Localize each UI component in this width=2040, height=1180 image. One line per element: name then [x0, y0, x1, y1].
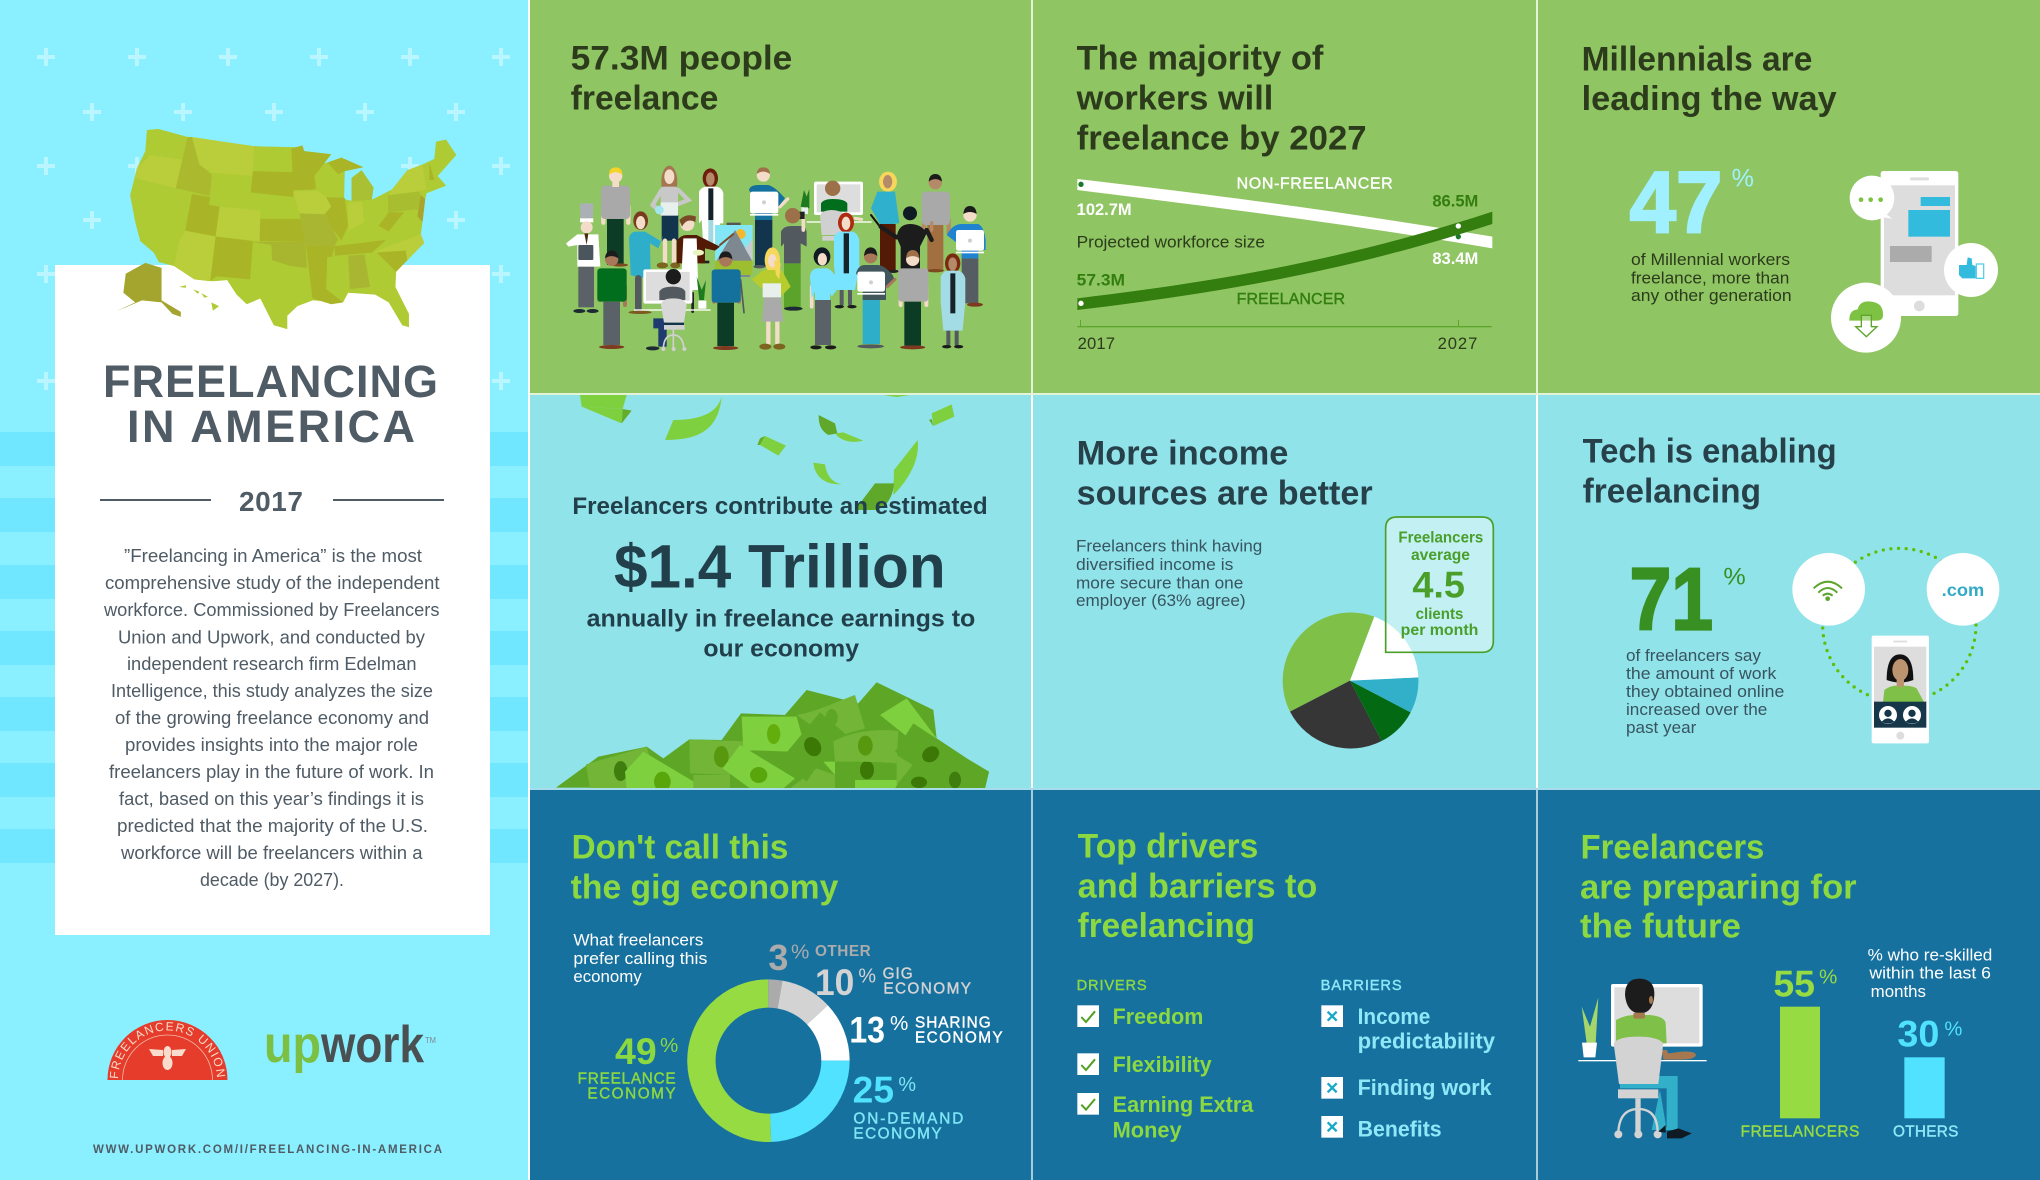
heading: freelance by 2027 — [1077, 119, 1367, 157]
panel: millennials are leading the way — [1538, 0, 2040, 393]
intro paragraph: of the growing freelance economy and — [115, 707, 429, 728]
woman in teal dress — [628, 211, 663, 314]
man in green shirt — [597, 251, 627, 349]
intro paragraph: Intelligence, this study analyzes the size — [111, 680, 433, 701]
logo: Upwork — [264, 1016, 436, 1074]
label: 49% freelance economy: FREELANCE — [578, 1070, 676, 1087]
description: Freelancers think having — [1076, 537, 1262, 556]
woman in pale teal coat — [941, 253, 965, 348]
stat description: of Millennial workers — [1631, 250, 1790, 269]
heading — [571, 828, 838, 906]
stat description: they obtained online — [1626, 682, 1784, 701]
title: FREELANCING — [103, 356, 438, 407]
label: 25% on-demand economy — [853, 1069, 963, 1142]
drivers list: Flexibility — [1113, 1052, 1212, 1077]
heading: The majority of — [1077, 39, 1324, 77]
label: 10% gig economy: ECONOMY — [883, 980, 971, 997]
man with phone seen from behind — [781, 208, 807, 311]
pie chart: income sources — [1283, 613, 1418, 748]
logo: Upwork: up — [264, 1016, 321, 1074]
chart caption: prefer calling this — [573, 949, 707, 968]
heading: sources are better — [1077, 474, 1373, 512]
label: 13% sharing economy: SHARING — [915, 1014, 991, 1031]
illustration: freelancer at desk — [1578, 979, 1707, 1138]
stat description: of freelancers say — [1626, 646, 1762, 665]
label: 49% freelance economy: % — [660, 1034, 678, 1057]
description: employer (63% agree) — [1076, 591, 1246, 610]
drivers list: DRIVERS — [1077, 978, 1147, 994]
callout: 4.5 clients per month: average — [1411, 547, 1470, 564]
bar: freelancers 55%: FREELANCERS — [1741, 1124, 1859, 1141]
line chart: projected workforce: Projected workforce size — [1077, 233, 1265, 252]
big stat 71%: % — [1723, 563, 1746, 590]
man in black seen from behind — [881, 206, 932, 270]
blonde woman in teal — [871, 172, 899, 273]
bar: others 30% — [1893, 1014, 1962, 1141]
economic contribution statement: annually in freelance earnings to — [587, 606, 975, 633]
label: 10% gig economy: GIG — [883, 965, 913, 982]
icon: .com: .com — [1942, 580, 1984, 600]
label: 49% freelance economy: 49 — [615, 1031, 657, 1072]
label: 10% gig economy — [815, 962, 971, 1003]
callout: 4.5 clients per month: 4.5 — [1412, 563, 1465, 605]
woman in light-blue shirt — [810, 247, 841, 349]
barriers list: BARRIERS — [1321, 978, 1402, 994]
drivers list — [1077, 978, 1254, 1142]
bar: freelancers 55% — [1741, 964, 1859, 1141]
label: 3% other: % — [791, 940, 809, 963]
big stat 47%: % — [1732, 165, 1754, 193]
callout: 4.5 clients per month: clients — [1416, 606, 1463, 623]
bar: freelancers 55%: 55 — [1773, 964, 1815, 1005]
blonde woman with book — [752, 247, 791, 350]
line chart: projected workforce: 2027 — [1438, 334, 1477, 353]
blond man — [601, 167, 630, 267]
panel: intro sidebar — [0, 0, 528, 1180]
bar: others 30%: % — [1944, 1017, 1962, 1040]
panel: $1.4 trillion — [530, 395, 1031, 792]
label: 10% gig economy: % — [858, 965, 876, 988]
heading: Freelancers — [1581, 828, 1764, 866]
white intro card — [55, 265, 490, 935]
label: 25% on-demand economy: ECONOMY — [853, 1125, 942, 1142]
economic contribution statement — [572, 493, 988, 663]
panel: freelancers are preparing for the future — [1538, 790, 2040, 1180]
heading: More income — [1077, 434, 1288, 472]
intro paragraph: ”Freelancing in America” is the most — [124, 545, 422, 566]
chef — [566, 203, 600, 313]
label: 25% on-demand economy: % — [898, 1073, 916, 1096]
year with rules: 2017 — [239, 486, 303, 517]
intro paragraph: decade (by 2027). — [200, 869, 344, 890]
heading: freelance — [571, 79, 718, 117]
map of the United States — [117, 129, 456, 329]
heading — [1077, 434, 1373, 512]
icon: wifi — [1792, 553, 1865, 626]
stat description: increased over the — [1626, 700, 1767, 719]
intro paragraph: Union and Upwork, and conducted by — [118, 626, 426, 648]
icon: speech bubble — [1850, 176, 1894, 220]
panel: top drivers and barriers — [1033, 790, 1536, 1180]
bar chart caption: within the last 6 — [1868, 964, 1991, 983]
barriers list — [1321, 978, 1496, 1142]
big stat 71%: 71 — [1630, 549, 1713, 648]
economic contribution statement: Freelancers contribute an estimated — [572, 493, 988, 520]
intro paragraph: workforce will be freelancers within a — [120, 842, 423, 863]
economic contribution statement: $1.4 Trillion — [614, 531, 946, 600]
heading: freelancing — [1583, 472, 1761, 510]
label: 13% sharing economy: ECONOMY — [915, 1029, 1003, 1046]
line chart: projected workforce — [1077, 175, 1492, 353]
intro paragraph — [103, 545, 439, 890]
heading — [1076, 39, 1367, 157]
panel: majority will freelance by 2027 — [1033, 0, 1536, 393]
chart caption: What freelancers — [573, 931, 703, 950]
man in blue shirt — [712, 251, 744, 350]
bar chart caption: months — [1871, 982, 1926, 1001]
heading — [1582, 41, 1837, 118]
callout: 4.5 clients per month: Freelancers — [1398, 530, 1483, 547]
easel with mountain painting — [715, 223, 753, 277]
stat description: past year — [1626, 718, 1697, 737]
label: 49% freelance economy — [578, 1031, 678, 1102]
panel: 57.3M people freelance — [530, 0, 1031, 393]
drivers list: Money — [1113, 1117, 1182, 1142]
big stat 47%: 47 — [1630, 153, 1722, 251]
label: 13% sharing economy: 13 — [849, 1009, 885, 1050]
intro paragraph: predicted that the majority of the U.S. — [117, 815, 428, 836]
callout: 4.5 clients per month — [1386, 517, 1493, 652]
intro paragraph: provides insights into the major role — [125, 734, 418, 755]
illustration: pile of money — [556, 682, 989, 792]
barriers list: Benefits — [1358, 1117, 1442, 1142]
intro paragraph: independent research firm Edelman — [127, 653, 416, 674]
description: diversified income is — [1076, 555, 1233, 574]
stat description — [1626, 646, 1784, 737]
economic contribution statement: our economy — [703, 636, 860, 663]
description: more secure than one — [1076, 573, 1243, 592]
red-haired doctor — [834, 213, 859, 308]
heading: are preparing for — [1580, 868, 1857, 906]
man in grey shirt, front — [898, 250, 928, 349]
man with laptop — [749, 167, 788, 268]
barriers list: Income — [1358, 1004, 1430, 1029]
drivers list: Freedom — [1113, 1004, 1203, 1029]
intro paragraph: fact, based on this year’s findings it is — [119, 788, 424, 809]
label: 13% sharing economy — [849, 1009, 1003, 1050]
barriers list: Finding work — [1358, 1075, 1492, 1100]
line chart: projected workforce: 57.3M — [1077, 271, 1125, 290]
line chart: projected workforce: NON-FREELANCER — [1237, 175, 1393, 192]
icon: cloud download — [1831, 283, 1901, 353]
chart caption — [573, 931, 707, 986]
bar: others 30%: OTHERS — [1893, 1124, 1958, 1141]
heading: leading the way — [1582, 80, 1837, 118]
heading: workers will — [1076, 79, 1273, 117]
line chart: projected workforce: 83.4M — [1432, 249, 1478, 268]
stat description: freelance, more than — [1631, 268, 1789, 287]
painter — [677, 215, 733, 312]
logo: Upwork: TM — [425, 1036, 436, 1045]
heading: 57.3M people — [571, 39, 792, 77]
illustration: crowd of freelancers — [566, 166, 986, 351]
donut chart: preferred names — [701, 993, 835, 1128]
heading: Don't call this — [572, 828, 788, 866]
bar chart caption: % who re-skilled — [1868, 946, 1992, 965]
heading: Millennials are — [1582, 41, 1812, 79]
stat description — [1631, 250, 1792, 305]
drivers list: Earning Extra — [1113, 1092, 1254, 1117]
label: 10% gig economy: 10 — [815, 962, 854, 1003]
heading — [1078, 828, 1317, 945]
title — [103, 356, 438, 452]
icon: .com — [1927, 553, 1999, 626]
stat description: any other generation — [1631, 286, 1792, 305]
man with laptop, far right — [947, 206, 986, 307]
title: IN AMERICA — [127, 401, 415, 452]
label: 49% freelance economy: ECONOMY — [587, 1085, 676, 1102]
worker at monitor, foreground — [634, 269, 711, 351]
panel: don't call this the gig economy — [530, 790, 1031, 1180]
label: 3% other: 3 — [768, 937, 788, 978]
heading — [1580, 828, 1857, 946]
man in grey with tan pants — [922, 174, 950, 272]
bar: others 30%: 30 — [1897, 1014, 1939, 1055]
line chart: projected workforce: FREELANCER — [1237, 291, 1345, 308]
heading: the future — [1580, 908, 1741, 946]
line chart: projected workforce: 86.5M — [1432, 192, 1478, 211]
logo: Upwork: work — [320, 1016, 424, 1074]
man with laptop, front — [856, 247, 895, 348]
heading — [571, 39, 792, 117]
long-haired woman with book — [653, 166, 688, 268]
panel: tech is enabling freelancing — [1538, 395, 2040, 788]
callout: 4.5 clients per month: per month — [1401, 622, 1478, 639]
line chart: projected workforce: 2017 — [1078, 334, 1115, 353]
panel: more income sources — [1033, 395, 1536, 788]
line chart: projected workforce: 102.7M — [1077, 200, 1132, 219]
heading: freelancing — [1078, 907, 1255, 945]
heading: Tech is enabling — [1583, 433, 1837, 471]
intro paragraph: freelancers play in the future of work. In — [109, 761, 434, 782]
heading: Top drivers — [1078, 828, 1258, 866]
dotted connection ring — [1823, 548, 1976, 702]
label: 3% other — [768, 937, 871, 978]
intro paragraph: comprehensive study of the independent — [105, 572, 440, 593]
doctor woman in white coat — [699, 168, 723, 263]
icon: thumbs up — [1944, 243, 1998, 297]
icon: phone video call — [1872, 636, 1929, 743]
icon: smartphone with chat — [1881, 171, 1958, 316]
illustration: falling banknotes — [580, 395, 954, 510]
heading: and barriers to — [1078, 868, 1317, 906]
source URL: WWW.UPWORK.COM/I/FREELANCING-IN-AMERICA — [93, 1144, 442, 1156]
bar: freelancers 55%: % — [1819, 966, 1837, 989]
barriers list: predictability — [1358, 1029, 1496, 1054]
label: 3% other: OTHER — [815, 943, 871, 960]
label: 25% on-demand economy: ON-DEMAND — [853, 1110, 963, 1127]
intro paragraph: workforce. Commissioned by Freelancers — [103, 599, 439, 620]
heading: the gig economy — [571, 868, 838, 906]
description — [1076, 537, 1262, 610]
logo: Freelancers Union: FREELANCERS UNION — [110, 1022, 226, 1078]
label: 13% sharing economy: % — [890, 1012, 908, 1035]
seated person at monitor — [801, 181, 872, 241]
chart caption: economy — [573, 967, 642, 986]
stat description: the amount of work — [1626, 664, 1777, 683]
label: 25% on-demand economy: 25 — [853, 1069, 894, 1110]
heading — [1583, 433, 1837, 510]
bar chart caption — [1868, 946, 1992, 1001]
